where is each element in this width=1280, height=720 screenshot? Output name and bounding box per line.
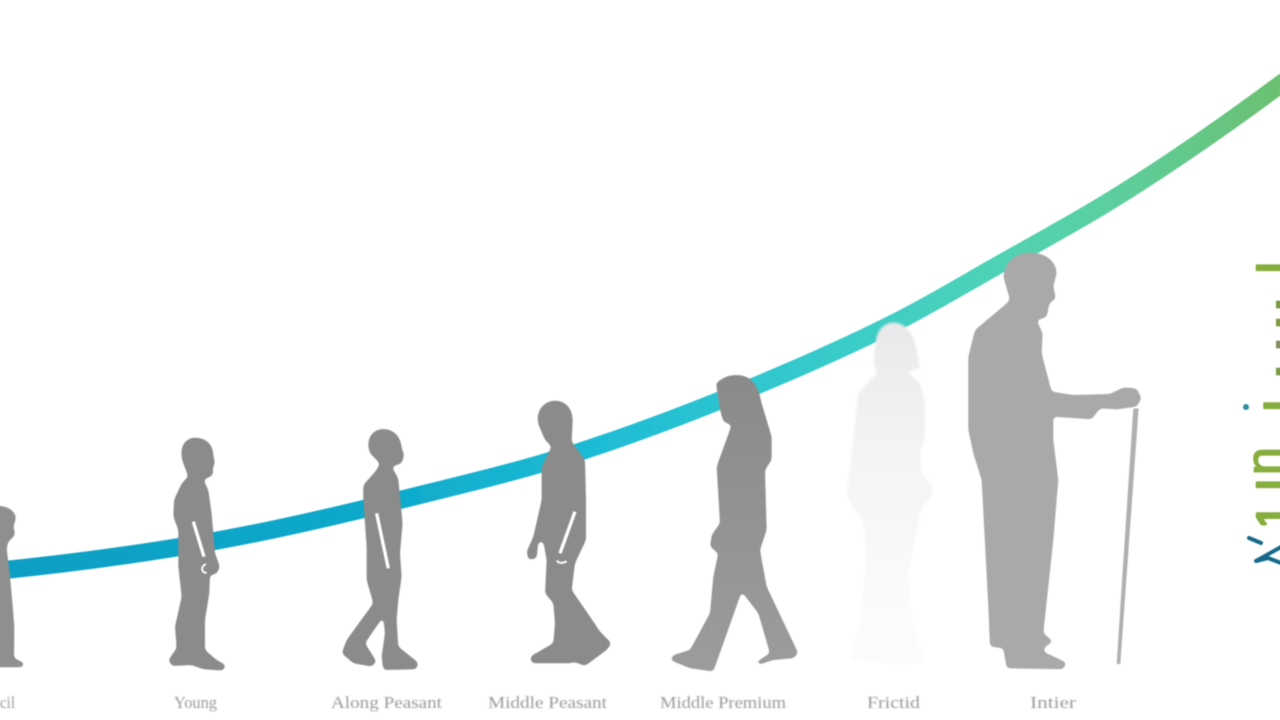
growth curve	[0, 81, 1280, 571]
stage labels: Middle Peasant	[488, 693, 607, 712]
figure: middle-aged man	[527, 401, 612, 666]
stage labels: Young	[174, 693, 217, 712]
figure: young child	[168, 438, 226, 671]
accent dot	[1243, 404, 1249, 410]
stage labels: cil	[0, 693, 15, 712]
figure: young adult	[342, 429, 418, 670]
figure: faded senior woman	[847, 323, 933, 665]
stage labels	[0, 693, 1076, 712]
figure: elderly man with cane	[968, 253, 1142, 669]
stage labels: Middle Premium	[660, 693, 786, 712]
stage labels: Frictid	[867, 693, 921, 712]
teal mark	[1249, 538, 1280, 563]
stage labels: Intier	[1030, 693, 1076, 712]
figure: middle-aged woman	[670, 375, 798, 672]
stage labels: Along Peasant	[331, 693, 442, 712]
figure: toddler	[0, 506, 24, 667]
vertical title clipped at right edge	[1236, 262, 1280, 563]
